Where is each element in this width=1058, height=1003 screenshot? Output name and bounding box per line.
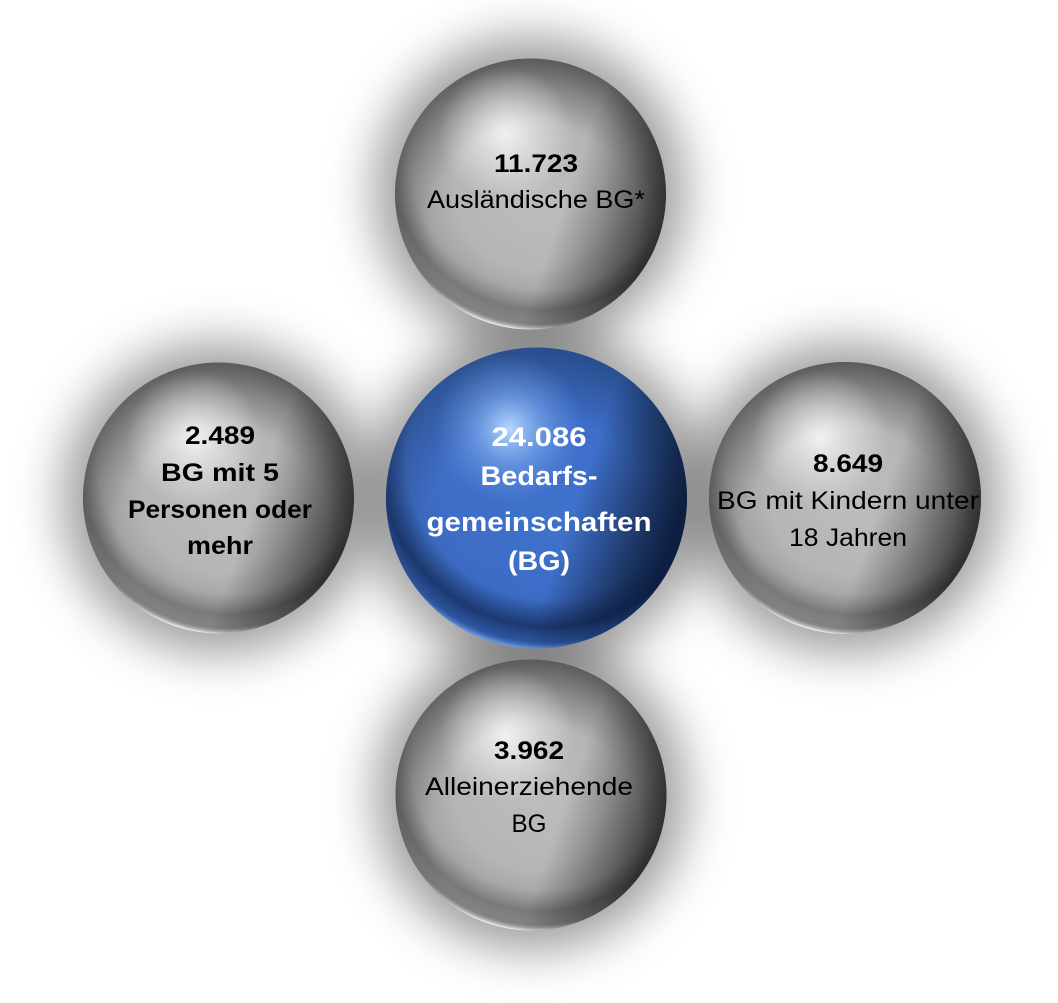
sphere: BG mit Kindern unter 18 Jahren xyxy=(709,362,981,634)
value: 8.649: 8.649 xyxy=(813,450,883,478)
value: 2.489: 2.489 xyxy=(185,422,255,450)
label: BG mit 5 Personen oder mehr: BG mit 5 xyxy=(161,459,279,487)
label: Ausländische BG*: Ausländische BG* xyxy=(427,186,645,214)
label: Alleinerziehende BG xyxy=(425,773,633,838)
label: Alleinerziehende BG: BG xyxy=(512,810,546,838)
label: Bedarfsgemeinschaften (BG): (BG) xyxy=(508,546,570,576)
label: BG mit Kindern unter 18 Jahren xyxy=(717,487,979,552)
label: Bedarfsgemeinschaften (BG): Bedarfs- xyxy=(480,461,598,491)
central sphere: Bedarfsgemeinschaften xyxy=(386,348,687,648)
label: BG mit Kindern unter 18 Jahren: BG mit Kindern unter xyxy=(717,487,979,515)
value: 11.723: 11.723 xyxy=(494,150,578,178)
sphere: Ausländische BG xyxy=(395,58,666,330)
value: 24.086: 24.086 xyxy=(492,422,586,452)
sphere: Alleinerziehende BG xyxy=(396,660,666,930)
label: BG mit 5 Personen oder mehr xyxy=(128,459,312,560)
label: BG mit 5 Personen oder mehr: mehr xyxy=(187,532,253,560)
label: BG mit Kindern unter 18 Jahren: 18 Jahren xyxy=(789,524,907,552)
value: 3.962: 3.962 xyxy=(494,737,564,765)
label: BG mit 5 Personen oder mehr: Personen oder xyxy=(128,496,312,524)
sphere: BG mit 5 Personen oder mehr xyxy=(83,362,354,634)
label: Bedarfsgemeinschaften (BG) xyxy=(426,461,652,576)
label: Alleinerziehende BG: Alleinerziehende xyxy=(425,773,633,801)
label: Bedarfsgemeinschaften (BG): gemeinschaften xyxy=(426,507,652,537)
